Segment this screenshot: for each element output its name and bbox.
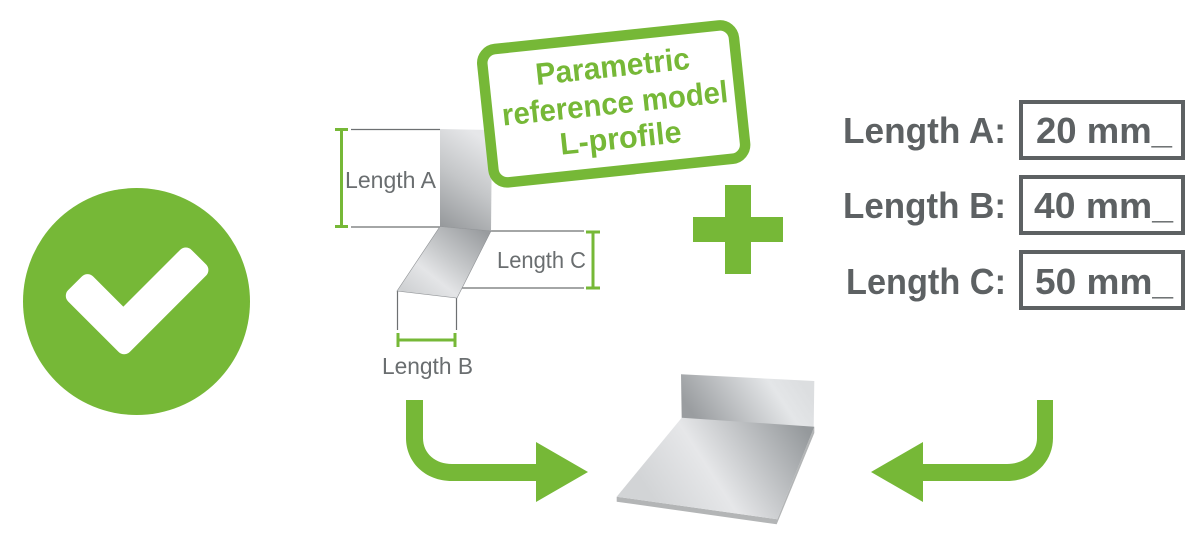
- row: Length A 20 mm: 20 mm_: [1036, 110, 1173, 151]
- reference profile: upper leg: [440, 129, 492, 231]
- dimension: Length C: Length C: [497, 247, 586, 273]
- dimension: Length A: [335, 130, 440, 227]
- row: Length B 40 mm: 40 mm_: [1034, 185, 1174, 226]
- row: Length C 50 mm: [846, 252, 1183, 308]
- reference profile: lower leg: [397, 226, 491, 298]
- row: Length B 40 mm: Length B:: [843, 185, 1006, 226]
- diagram: L-profile reference model with dimensions: [335, 129, 600, 379]
- result: finished L-profile part: [617, 374, 814, 524]
- row: Length A 20 mm: [843, 102, 1183, 158]
- stamp: Parametric reference model L-profile: reference model: [500, 74, 730, 133]
- row: Length A 20 mm: Length A:: [843, 110, 1006, 151]
- dimension: Length A: Length A: [345, 167, 437, 193]
- row: Length B 40 mm: [843, 177, 1183, 233]
- stamp: Parametric reference model L-profile: Parametric: [534, 41, 691, 92]
- row: Length C 50 mm: Length C:: [846, 261, 1006, 302]
- stamp: Parametric reference model L-profile: L-profile: [558, 114, 683, 162]
- icon: green check badge: [23, 188, 250, 415]
- arrow: right curved to result: [871, 400, 1053, 502]
- stamp: Parametric reference model L-profile: [481, 24, 747, 184]
- dimension: Length B: [382, 291, 473, 379]
- result: upright flange: [681, 374, 814, 427]
- dimension: Length C: [462, 231, 600, 288]
- arrow: left curved to result: [406, 400, 588, 502]
- result: sheet edge: [617, 427, 814, 524]
- dimension: Length B: Length B: [382, 353, 473, 379]
- row: Length C 50 mm: 50 mm_: [1035, 261, 1174, 302]
- result: base plate: [617, 418, 814, 519]
- icon: plus sign: [693, 185, 783, 274]
- parameter inputs: [843, 102, 1183, 308]
